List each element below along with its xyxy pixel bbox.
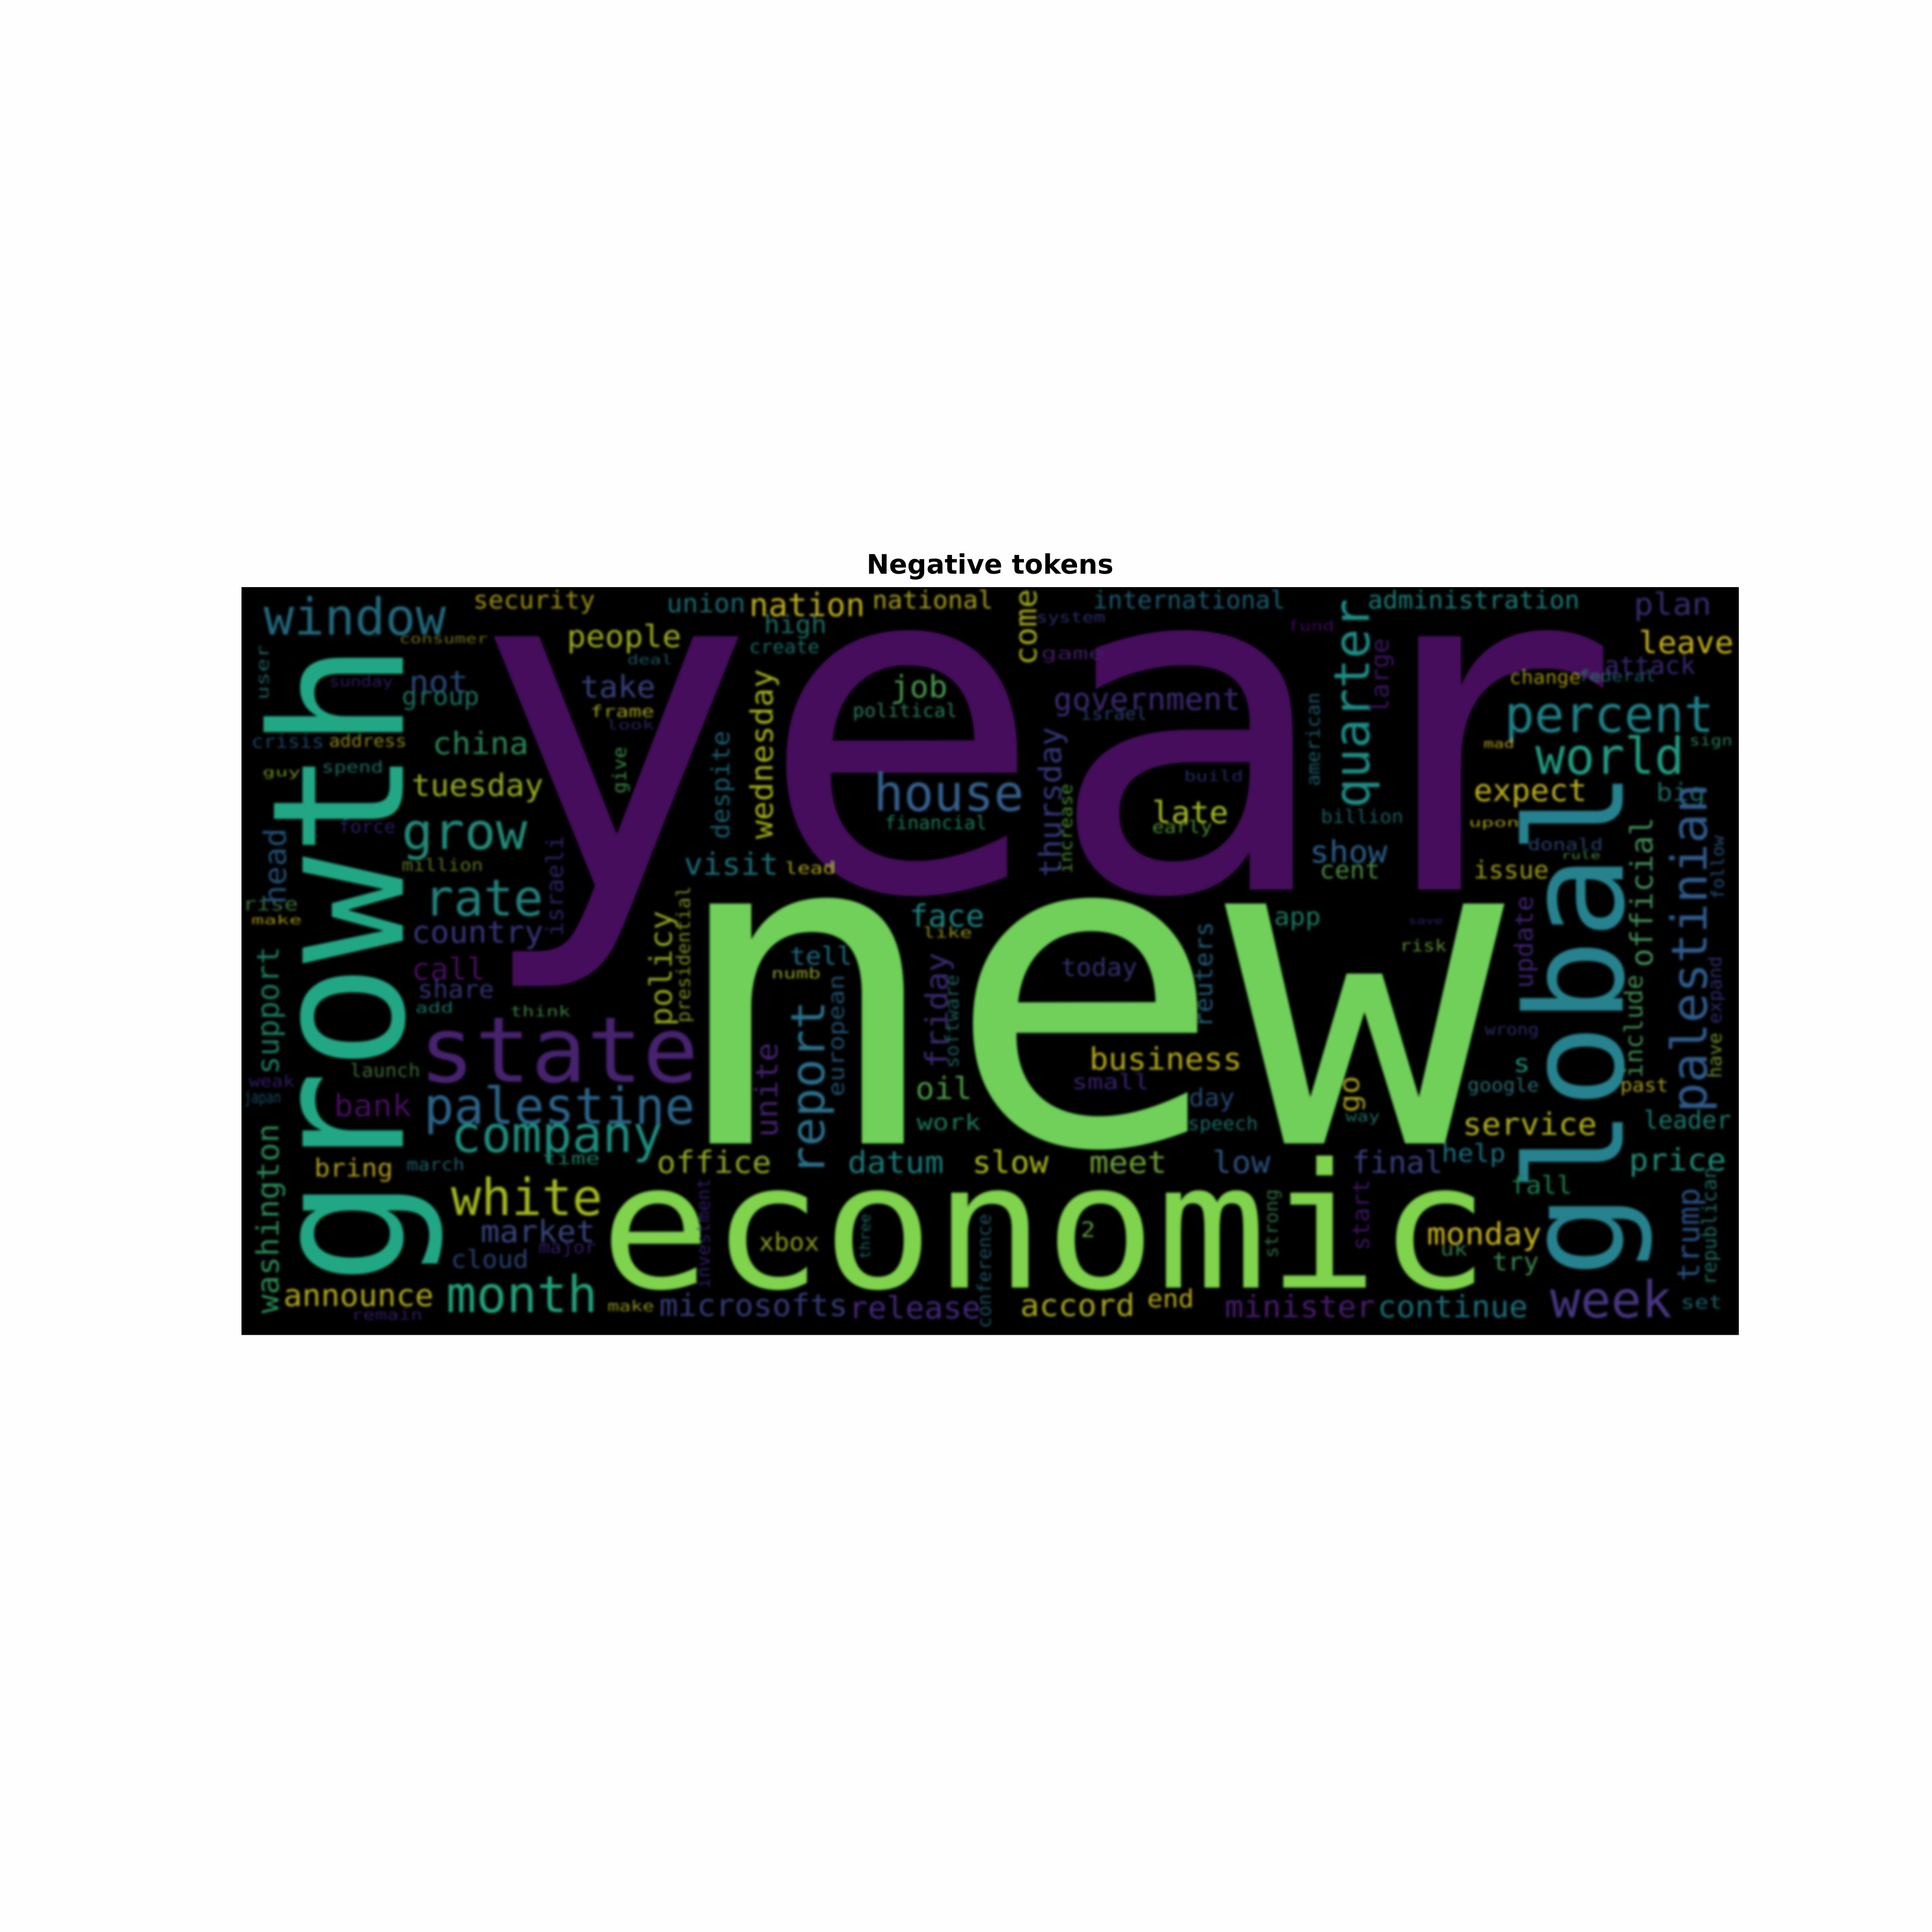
small horizontal words: think [510, 1003, 571, 1020]
small horizontal words: expect [1474, 772, 1587, 808]
small horizontal words: add [415, 999, 453, 1016]
small horizontal words: guy [262, 765, 301, 779]
small horizontal words: rule [1561, 850, 1600, 861]
small horizontal words: political [853, 700, 957, 722]
small horizontal words: sign [1689, 732, 1732, 749]
small vertical words: european [824, 975, 850, 1096]
small horizontal words: people [567, 618, 682, 654]
small horizontal words: financial [884, 813, 987, 834]
small horizontal words: cent [1320, 855, 1380, 884]
small horizontal words: announce [283, 1278, 434, 1314]
small horizontal words: wrong [1485, 1021, 1539, 1040]
small vertical words: give [609, 747, 631, 794]
small horizontal words: build [1184, 768, 1243, 785]
small horizontal words: consumer [399, 631, 488, 646]
small horizontal words: system [1036, 609, 1105, 626]
small horizontal words: house [874, 765, 1024, 823]
small horizontal words: plan [1634, 587, 1711, 623]
small horizontal words: union [667, 589, 745, 619]
small horizontal words: set [1681, 1292, 1723, 1313]
small horizontal words: office [657, 1145, 771, 1181]
small vertical words: large [1365, 638, 1394, 713]
small horizontal words: create [749, 636, 819, 658]
small vertical words: reuters [1189, 921, 1218, 1028]
small horizontal words: end [1147, 1284, 1194, 1313]
small vertical words: come [1008, 589, 1044, 665]
small horizontal words: national [873, 586, 993, 614]
small vertical words: update [1510, 896, 1539, 988]
small vertical words: presidential [674, 886, 695, 1023]
word: new: new [665, 736, 1508, 1247]
small horizontal words: time [542, 1148, 600, 1169]
small horizontal words: datum [848, 1145, 944, 1181]
panel: word cloud image [241, 587, 1739, 1335]
small horizontal words: xbox [759, 1227, 819, 1256]
small horizontal words: issue [1474, 855, 1549, 884]
small horizontal words: percent [1504, 686, 1714, 744]
small vertical words: head [258, 828, 294, 904]
small vertical words: investment [693, 1178, 714, 1289]
small vertical words: official [1624, 817, 1660, 967]
word: economic: economic [600, 1127, 1490, 1329]
small horizontal words: address [329, 730, 407, 751]
small horizontal words: app [1274, 902, 1321, 931]
small horizontal words: visit [684, 846, 779, 882]
small horizontal words: try [1492, 1247, 1539, 1276]
small vertical words: strong [1261, 1189, 1283, 1258]
small horizontal words [243, 586, 1733, 1329]
small horizontal words: sunday [329, 673, 393, 690]
small horizontal words: high [764, 610, 827, 639]
small horizontal words: big [1656, 778, 1706, 807]
small horizontal words: attack [1604, 651, 1695, 680]
small horizontal words: continue [1378, 1289, 1528, 1324]
small horizontal words: 2 [1081, 1218, 1095, 1242]
small horizontal words: make [251, 913, 302, 927]
small horizontal words: oil [916, 1071, 972, 1107]
small vertical words: go [1333, 1075, 1366, 1113]
small horizontal words: today [1061, 953, 1137, 982]
small horizontal words: accord [1020, 1287, 1135, 1323]
small horizontal words: force [339, 816, 396, 838]
small horizontal words: like [923, 924, 972, 941]
small vertical words: despite [706, 730, 735, 839]
small horizontal words: palestine [424, 1078, 695, 1136]
small horizontal words: low [1212, 1145, 1271, 1181]
small horizontal words: frame [590, 702, 654, 721]
small horizontal words: white [451, 1169, 603, 1227]
small horizontal words: international [1093, 586, 1285, 614]
small horizontal words: donald [1528, 836, 1603, 854]
small horizontal words: slow [972, 1145, 1049, 1181]
small vertical words: report [781, 1000, 836, 1175]
small horizontal words: march [407, 1154, 465, 1175]
small horizontal words: security [473, 586, 595, 614]
small horizontal words: late [1152, 795, 1228, 831]
small vertical words: follow [1708, 835, 1728, 899]
small horizontal words: bring [314, 1154, 393, 1183]
small horizontal words: deal [627, 652, 673, 668]
small vertical words: trump [1671, 1188, 1707, 1282]
small horizontal words: rate [424, 869, 544, 928]
small vertical words: expand [1704, 956, 1726, 1024]
small horizontal words: tuesday [412, 767, 544, 803]
small horizontal words: country [412, 914, 544, 950]
small horizontal words: leader [1644, 1106, 1731, 1135]
small horizontal words: fall [1511, 1171, 1572, 1200]
small horizontal words: window [264, 588, 446, 647]
small horizontal words: month [446, 1266, 598, 1324]
small horizontal words: crisis [251, 731, 324, 753]
small horizontal words: administration [1367, 586, 1579, 614]
word: growth: growth [232, 642, 447, 1285]
small horizontal words: major [538, 1237, 596, 1257]
small vertical words: three [857, 1213, 874, 1259]
small horizontal words: million [401, 855, 483, 875]
small horizontal words: share [418, 975, 494, 1004]
small horizontal words: israel [1081, 704, 1147, 724]
small vertical words: include [1619, 975, 1648, 1078]
small horizontal words: group [401, 682, 479, 711]
small horizontal words: grow [401, 803, 528, 861]
small vertical words: palestinian [1661, 784, 1718, 1113]
small horizontal words: remain [351, 1306, 423, 1323]
small horizontal words: weak [249, 1072, 295, 1091]
small horizontal words: fund [1287, 618, 1334, 635]
small horizontal words: google [1467, 1075, 1539, 1096]
small vertical words: unite [749, 1042, 785, 1137]
small horizontal words: week [1550, 1271, 1672, 1329]
small horizontal words: small [1072, 1071, 1150, 1095]
word: global: global [1497, 770, 1655, 1278]
small vertical words: washington [250, 1124, 286, 1313]
small vertical words: increase [1056, 784, 1076, 874]
small horizontal words: face [909, 898, 984, 934]
small horizontal words: risk [1400, 936, 1446, 955]
small horizontal words: call [412, 951, 486, 987]
small horizontal words: federal [1578, 668, 1656, 685]
title: Negative tokens [867, 549, 1114, 580]
small horizontal words: uk [1440, 1239, 1468, 1261]
small horizontal words: work [917, 1109, 981, 1135]
small horizontal words: price [1629, 1142, 1726, 1178]
small horizontal words: lead [785, 859, 836, 878]
small horizontal words: release [849, 1290, 981, 1326]
small horizontal words: japan [244, 1088, 281, 1107]
small horizontal words: service [1462, 1107, 1597, 1143]
small horizontal words: bank [334, 1088, 412, 1124]
word: state: state [419, 998, 699, 1104]
small horizontal words: billion [1321, 807, 1403, 828]
small vertical words: wednesday [744, 669, 780, 839]
small horizontal words: mad [1483, 737, 1514, 751]
small horizontal words: meet [1089, 1145, 1167, 1181]
small vertical words: friday [919, 953, 955, 1069]
small vertical words: support [250, 946, 286, 1074]
small vertical words [250, 589, 1728, 1328]
small horizontal words: rise [243, 894, 298, 916]
small vertical words: american [1303, 692, 1324, 786]
small horizontal words: minister [1225, 1289, 1375, 1324]
small vertical words: software [942, 975, 963, 1069]
small horizontal words: tell [790, 942, 853, 971]
small horizontal words: business [1089, 1041, 1242, 1077]
small horizontal words: leave [1639, 625, 1733, 661]
small horizontal words: early [1152, 817, 1212, 837]
small vertical words: israeli [542, 836, 569, 936]
small horizontal words: market [480, 1213, 595, 1249]
small horizontal words: company [451, 1106, 663, 1165]
small vertical words: thursday [1033, 727, 1069, 877]
small horizontal words: monday [1427, 1216, 1541, 1252]
small horizontal words: spend [321, 758, 383, 777]
small horizontal words: government [1053, 681, 1241, 717]
small horizontal words: help [1441, 1139, 1506, 1168]
small horizontal words: take [580, 669, 655, 705]
small vertical words: conference [974, 1213, 996, 1328]
small vertical words: quarter [1323, 599, 1381, 808]
small horizontal words: job [891, 669, 948, 705]
small horizontal words: cloud [451, 1245, 529, 1274]
small vertical words: start [1348, 1179, 1375, 1250]
word: year: year [470, 460, 1621, 999]
small horizontal words: make [608, 1298, 654, 1315]
small horizontal words: speech [1188, 1113, 1258, 1135]
small vertical words: republican [1698, 1167, 1721, 1285]
small horizontal words: microsofts [659, 1287, 848, 1323]
small horizontal words: nation [749, 587, 865, 624]
small vertical words: user [253, 645, 273, 700]
small horizontal words: s [1513, 1049, 1531, 1078]
small horizontal words: save [1408, 916, 1443, 927]
small horizontal words: numb [771, 965, 821, 982]
small horizontal words: change [1510, 667, 1581, 689]
small horizontal words: not [409, 664, 468, 700]
small horizontal words: world [1535, 728, 1685, 786]
small horizontal words: final [1352, 1145, 1443, 1181]
small horizontal words: look [606, 717, 654, 733]
small vertical words: have [1704, 1033, 1726, 1078]
small horizontal words: day [1189, 1084, 1235, 1113]
small horizontal words: china [433, 726, 529, 762]
small horizontal words: game [1041, 643, 1104, 663]
small horizontal words: way [1345, 1108, 1380, 1125]
small horizontal words: show [1310, 834, 1388, 870]
small vertical words: policy [643, 911, 679, 1027]
small horizontal words: past [1620, 1075, 1668, 1096]
small horizontal words: upon [1469, 816, 1519, 830]
small horizontal words: launch [350, 1060, 420, 1082]
